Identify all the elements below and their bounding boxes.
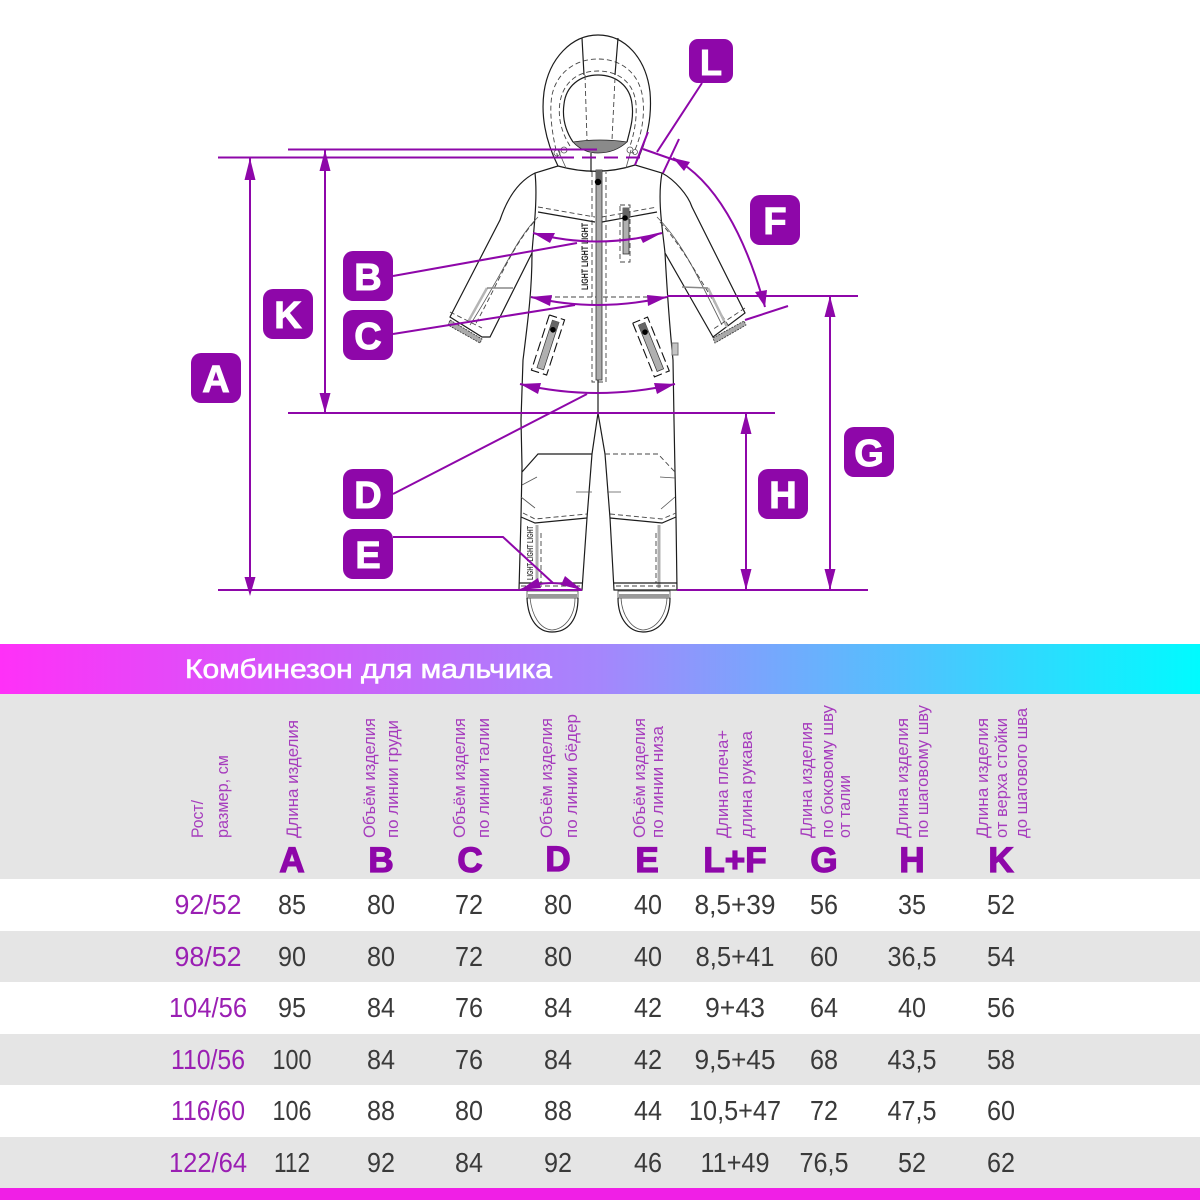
row 122/64: 122/64 [169,1147,247,1178]
dimension F [673,158,788,320]
column E heading: E [635,841,659,880]
column H heading: H [899,841,925,880]
size column heading [188,755,232,838]
row 104/56: 76 [455,992,483,1023]
row 98/52: 36,5 [888,941,936,972]
booties [527,591,670,632]
column D heading: Объём изделия [537,718,556,838]
row 110/56: 42 [634,1044,662,1075]
row 122/64: 92 [367,1147,395,1178]
column L+F heading: L+F [703,841,767,880]
row 110/56: 43,5 [888,1044,936,1075]
front zipper [592,170,606,382]
size column heading: Рост/ [188,800,207,838]
bottom magenta bar [0,1188,1200,1200]
row 122/64: 52 [898,1147,926,1178]
row 92/52: 92/52 [174,889,242,920]
row 98/52: 54 [987,941,1015,972]
row 116/60: 106 [272,1095,312,1126]
row 122/64: 62 [987,1147,1015,1178]
row 92/52 [0,879,1200,931]
row 92/52: 40 [634,889,662,920]
row 104/56: 40 [898,992,926,1023]
row 104/56: 84 [544,992,572,1023]
size column heading: размер, см [213,755,232,838]
column D heading: D [545,840,571,879]
row 110/56: 84 [367,1044,395,1075]
column G heading: по боковому шву [818,705,837,838]
row 116/60: 88 [544,1095,572,1126]
row 122/64: 112 [274,1147,310,1178]
row 92/52: 56 [810,889,838,920]
row 116/60: 116/60 [171,1095,245,1126]
column B heading: B [368,841,394,880]
table header [0,694,1200,880]
badge F [750,195,800,245]
title band [0,644,1200,694]
badge G: G [854,433,884,475]
body and sleeves [448,165,746,472]
column K heading: от верха стойки [992,718,1011,838]
dimension G [667,296,868,590]
column B heading [360,718,402,880]
column K heading: Длина изделия [973,718,992,838]
row 98/52: 60 [810,941,838,972]
column K heading: до шагового шва [1012,707,1031,838]
row 98/52: 98/52 [174,941,242,972]
column C heading: Объём изделия [450,718,469,838]
column L+F heading [703,730,767,880]
row 110/56: 84 [544,1044,572,1075]
dimension C [393,295,667,334]
badge B [343,251,393,301]
column G heading: G [810,841,838,880]
column B heading: Объём изделия [360,718,379,838]
dimension B [393,233,662,276]
column D heading: по линии бёдер [562,714,581,838]
row 104/56: 64 [810,992,838,1023]
row 116/60 [0,1085,1200,1137]
row 116/60: 88 [367,1095,395,1126]
row 110/56: 76 [455,1044,483,1075]
row 110/56: 110/56 [171,1044,245,1075]
row 116/60: 60 [987,1095,1015,1126]
row 104/56 [0,982,1200,1034]
dimension L [635,83,702,173]
row 92/52: 85 [278,889,306,920]
badge D: D [354,475,382,517]
badge D [343,469,393,519]
dimension E [393,537,582,590]
row 92/52: 80 [544,889,572,920]
row 98/52: 40 [634,941,662,972]
column A heading: Длина изделия [283,720,302,838]
badge H: H [769,475,797,517]
column D heading [537,714,581,879]
reflective print text: LIGHT LIGHT LIGHT [580,223,591,290]
dimension H [740,413,752,590]
row 116/60: 80 [455,1095,483,1126]
dimension D [393,383,675,494]
badge E: E [355,535,381,577]
row 98/52 [0,931,1200,982]
column K heading: K [988,841,1014,880]
row 104/56: 9+43 [705,992,765,1023]
row 104/56: 95 [278,992,306,1023]
row 116/60: 47,5 [888,1095,936,1126]
badge L: L [700,42,722,83]
row 104/56: 84 [367,992,395,1023]
row 92/52: 8,5+39 [694,889,776,920]
badge F: F [763,201,787,243]
row 98/52: 80 [544,941,572,972]
row 104/56: 42 [634,992,662,1023]
hood [543,35,650,172]
column E heading: по линии низа [648,725,667,838]
dimension A [218,158,640,596]
row 92/52: 72 [455,889,483,920]
column H heading: Длина изделия [893,718,912,838]
badge A [191,353,241,403]
row 110/56: 68 [810,1044,838,1075]
column G heading [797,705,854,880]
garment technical drawing [448,35,746,632]
reflective print text: LIGHT LIGHT LIGHT [526,526,535,580]
badge G [844,427,894,477]
row 98/52: 80 [367,941,395,972]
row 110/56: 9,5+45 [694,1044,776,1075]
row 104/56: 104/56 [169,992,247,1023]
badge L [689,39,733,83]
badge K: K [274,295,302,337]
row 98/52: 72 [455,941,483,972]
column A heading: A [279,841,305,880]
column C heading [450,718,493,880]
title band: Комбинезон для мальчика [185,654,553,684]
column L+F heading: длина рукава [737,730,756,838]
column C heading: C [457,841,483,880]
row 116/60: 72 [810,1095,838,1126]
badge A: A [202,359,230,401]
chest pocket [620,205,630,262]
row 110/56: 100 [272,1044,312,1075]
badge B: B [354,257,382,299]
row 122/64: 76,5 [800,1147,848,1178]
legs [519,380,677,590]
row 92/52: 80 [367,889,395,920]
row 122/64 [0,1137,1200,1188]
row 92/52: 52 [987,889,1015,920]
column C heading: по линии талии [474,718,493,838]
reflective print text [526,223,591,580]
dimension K [288,150,775,413]
row 110/56 [0,1034,1200,1085]
column E heading [630,718,667,880]
row 92/52: 35 [898,889,926,920]
measurement lines [218,83,868,596]
row 110/56: 58 [987,1044,1015,1075]
column E heading: Объём изделия [630,718,649,838]
row 122/64: 11+49 [700,1147,770,1178]
row 122/64: 92 [544,1147,572,1178]
row 98/52: 8,5+41 [696,941,774,972]
column H heading: по шаговому шву [913,705,932,838]
row 116/60: 10,5+47 [689,1095,781,1126]
badge C [343,310,393,360]
badge E [343,529,393,579]
row 122/64: 46 [634,1147,662,1178]
row 98/52: 90 [278,941,306,972]
column G heading: Длина изделия [797,722,816,838]
badge C: C [354,316,382,358]
side pockets [531,315,669,377]
column A heading [279,720,305,880]
row 116/60: 44 [634,1095,662,1126]
row 104/56: 56 [987,992,1015,1023]
column K heading [973,707,1031,880]
row 122/64: 84 [455,1147,483,1178]
column B heading: по линии груди [383,720,402,838]
column H heading [893,705,932,880]
badge H [758,469,808,519]
column L+F heading: Длина плеча+ [713,730,732,838]
column G heading: от талии [835,775,854,838]
badge K [263,289,313,339]
